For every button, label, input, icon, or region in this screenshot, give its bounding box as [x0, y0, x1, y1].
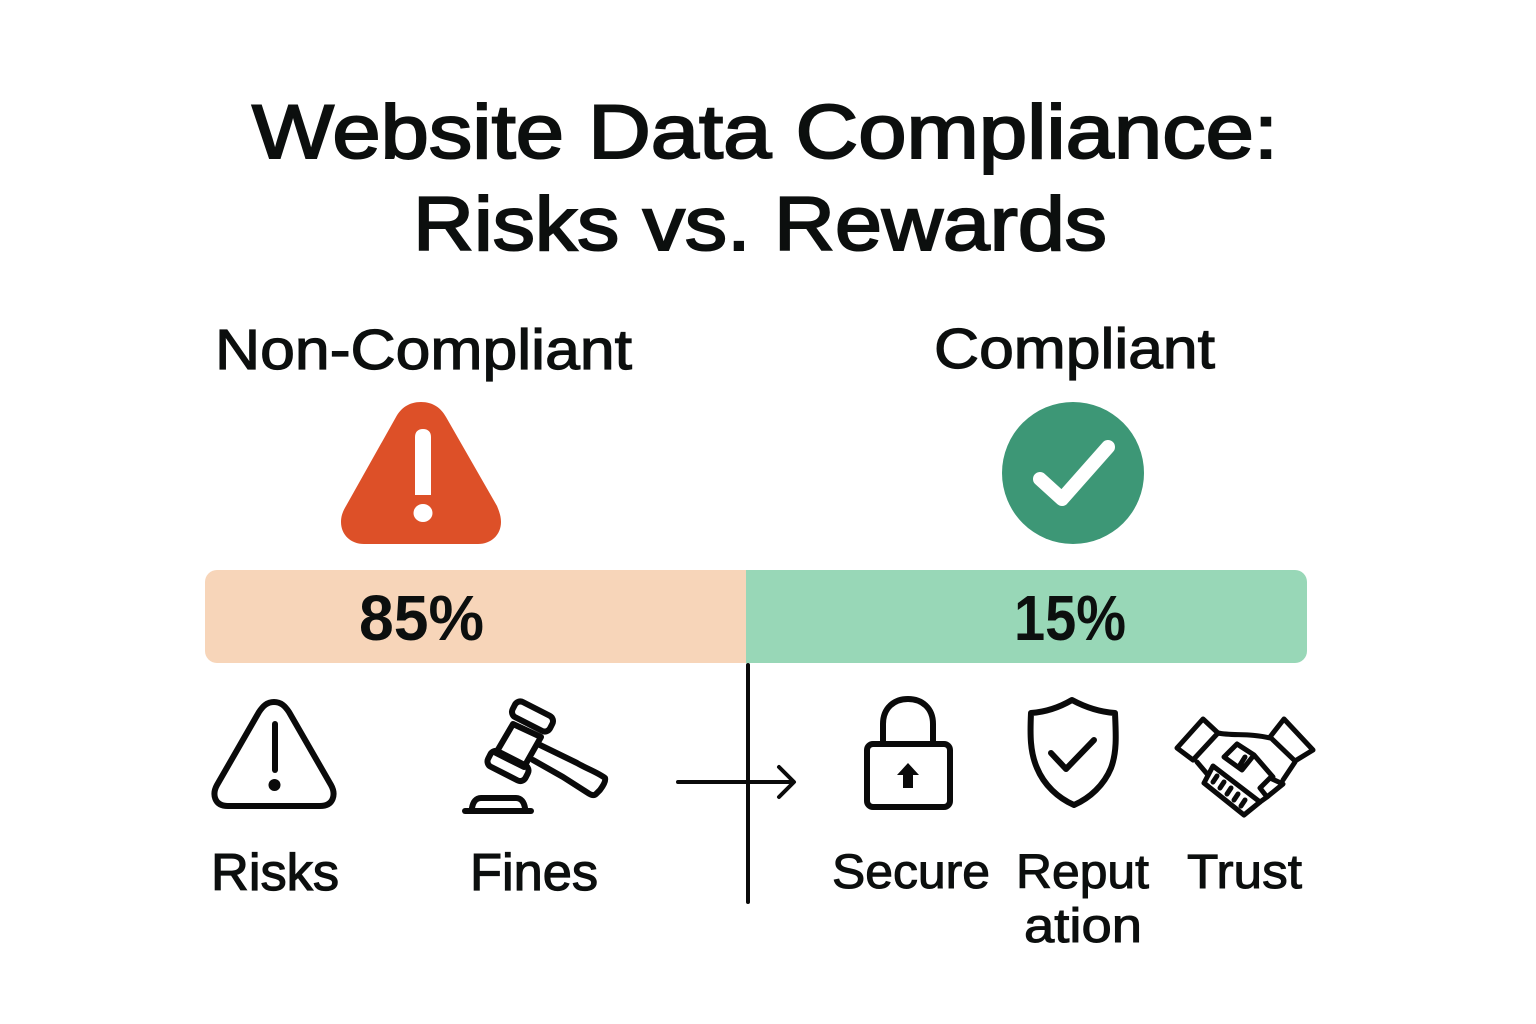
divider line — [746, 663, 750, 904]
label: Fines: Fines — [470, 844, 598, 902]
icon: handshake — [1177, 719, 1313, 815]
title: Website Data Compliance: — [252, 90, 1278, 175]
icon: risks warning outline — [215, 702, 333, 806]
icon: green check circle — [1002, 402, 1144, 544]
icon: shield with check — [1031, 700, 1116, 805]
label: Reputation — [1016, 846, 1149, 953]
heading: Non-Compliant: Non-Compliant — [215, 318, 632, 382]
value: 85%: 85% — [359, 582, 484, 654]
label: Secure: Secure — [832, 846, 990, 899]
label: Reputation: ation — [1024, 900, 1142, 953]
arrow — [678, 767, 794, 797]
icon: padlock — [867, 699, 950, 807]
stacked percentage bar — [205, 570, 1307, 663]
title: Risks vs. Rewards — [413, 182, 1107, 267]
value: 15%: 15% — [1014, 582, 1126, 654]
heading: Compliant: Compliant — [934, 317, 1215, 381]
label: Reputation: Reput — [1016, 846, 1149, 899]
icon: gavel — [465, 699, 605, 811]
bar segment: compliant 15% — [746, 570, 1307, 663]
icon: red warning triangle — [341, 402, 501, 544]
label: Risks: Risks — [211, 844, 339, 902]
bar segment: non-compliant 85% — [205, 570, 746, 663]
label: Trust: Trust — [1187, 846, 1302, 899]
title — [252, 90, 1278, 267]
